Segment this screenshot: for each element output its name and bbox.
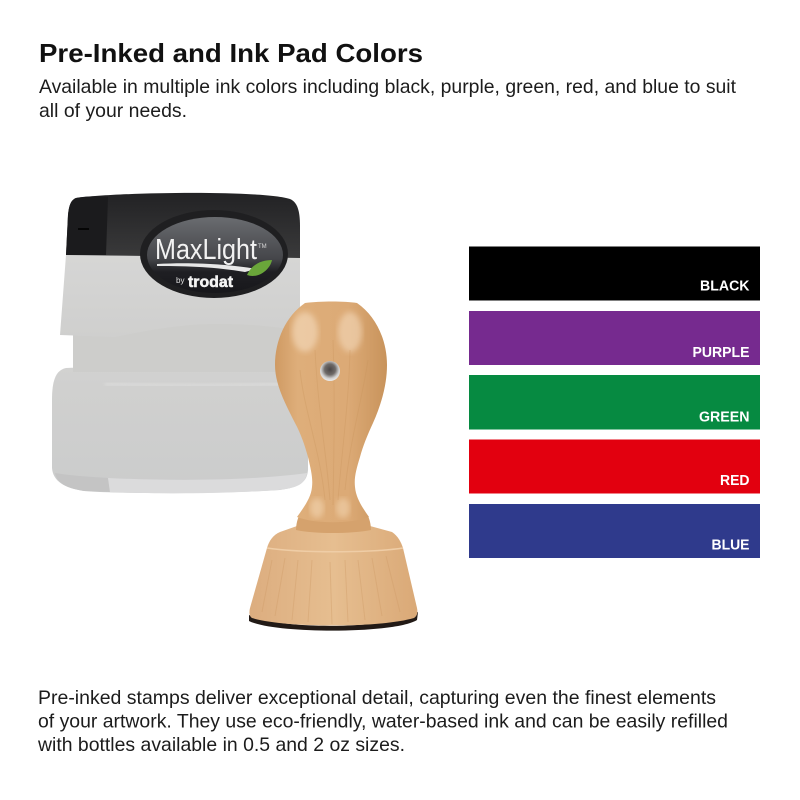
wooden flange [296,516,371,533]
swatch: black: BLACK [700,278,750,294]
stamp logo oval: MaxLight [155,234,257,266]
swatch: blue: BLUE [712,538,750,554]
description text: of your artwork. They use eco-friendly, water-based ink and can be easily refilled [38,710,728,732]
stamp base [52,367,308,493]
ink color swatches [469,246,760,558]
wooden base [249,526,417,626]
stamp logo oval: TM [258,244,267,250]
swatch: red [469,440,760,494]
stamp logo oval: trodat [188,274,234,291]
swatch: purple [469,311,760,365]
swatch: green: GREEN [699,410,750,426]
swatch: purple: PURPLE [692,345,750,361]
stamp black cap [66,193,300,258]
metal pin [320,361,340,381]
stamp rubber foot [249,612,418,631]
icon: wooden hand stamp [249,302,418,631]
swatch: blue [469,504,760,558]
stamp logo oval [140,210,288,298]
swatch: red: RED [720,473,750,489]
icon: MaxLight pre-inked stamp [52,193,308,493]
wooden handle [275,302,387,522]
description text: Pre-inked stamps deliver exceptional detail, capturing even the finest elements [38,687,716,709]
stamp logo oval: by [176,276,184,285]
intro text: all of your needs. [39,100,187,122]
stamp neck [73,318,300,372]
description text: with bottles available in 0.5 and 2 oz sizes. [37,734,405,756]
intro text [39,76,737,122]
stamp grey body [60,255,300,337]
swatch: black [469,246,760,300]
description text [37,687,728,756]
intro text: Available in multiple ink colors including black, purple, green, red, and blue to suit [39,76,737,98]
swatch: green [469,375,760,430]
title: Pre-Inked and Ink Pad Colors [39,38,423,68]
